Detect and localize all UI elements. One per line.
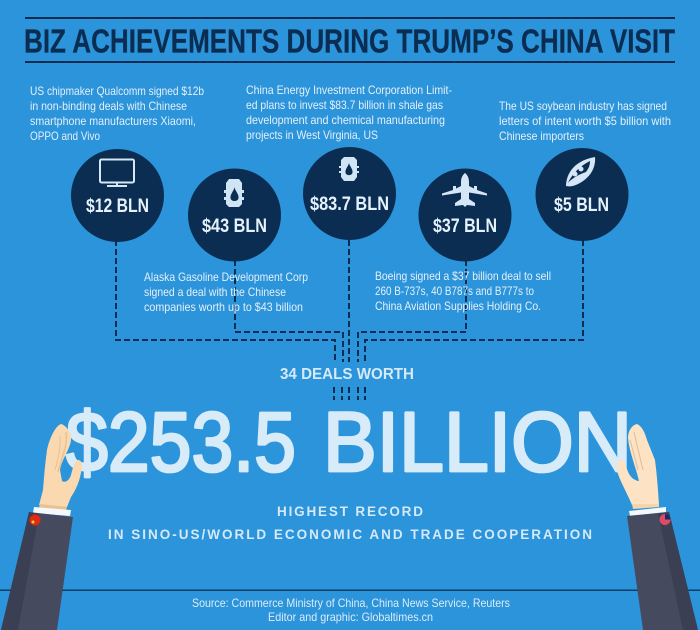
heading: 34 deals worth: 34 DEALS WORTH — [280, 366, 414, 383]
text block: Qualcomm: OPPO and Vivo — [30, 129, 100, 143]
text block: Boeing: Boeing signed a $37 billion deal to sell — [375, 269, 551, 283]
text block: China Energy — [246, 83, 452, 142]
circle: $43 BLN: $43 BLN — [202, 216, 267, 237]
source — [192, 596, 510, 624]
text block: soybean: The US soybean industry has signed — [499, 99, 667, 113]
text block: Boeing — [375, 269, 551, 313]
circle: $5 BLN — [536, 148, 628, 241]
text block: Qualcomm: US chipmaker Qualcomm signed $12b — [30, 84, 204, 98]
circle: $37 BLN: $37 BLN — [433, 216, 497, 237]
text block: Boeing: 260 B-737s, 40 B787s and B777s to — [375, 284, 534, 298]
icon: monitor — [100, 160, 134, 186]
text block: soybean — [499, 99, 671, 143]
circle: $12 BLN: $12 BLN — [86, 196, 149, 217]
source: Editor and graphic: Globaltimes.cn — [268, 610, 433, 624]
icon: airplane — [442, 173, 487, 207]
footer rule — [0, 590, 700, 591]
text block: China Energy: ed plans to invest $83.7 billion in shale gas — [246, 98, 443, 112]
right hand and sleeve — [617, 424, 698, 630]
big number — [66, 395, 632, 489]
circle: $37 BLN — [418, 168, 512, 262]
icon: gas canister — [224, 179, 244, 207]
text block: soybean: Chinese importers — [499, 129, 584, 143]
circle: $12 BLN — [71, 149, 164, 242]
icon: gas canister — [339, 157, 359, 181]
big number: $253.5 — [66, 395, 296, 489]
text block: soybean: letters of intent worth $5 billion with — [499, 114, 671, 128]
text block: Qualcomm: in non-binding deals with Chinese — [30, 99, 187, 113]
text block: China Energy: projects in West Virginia, US — [246, 128, 378, 142]
text block: Alaska Gasoline — [144, 270, 308, 314]
icon: soybean pod — [566, 157, 595, 186]
text block: Boeing: China Aviation Supplies Holding Co. — [375, 299, 541, 313]
subheading — [108, 504, 592, 542]
text block: Alaska Gasoline: companies worth up to $43 billion — [144, 300, 303, 314]
text block: Alaska Gasoline: signed a deal with the Chinese — [144, 285, 286, 299]
big number: BILLION — [323, 395, 632, 489]
left hand and sleeve — [1, 424, 82, 630]
text block: China Energy: development and chemical manufacturing — [246, 113, 445, 127]
subheading: HIGHEST RECORD — [277, 504, 423, 519]
subheading: IN SINO-US/WORLD ECONOMIC AND TRADE COOPERATION — [108, 527, 592, 542]
text block: Alaska Gasoline: Alaska Gasoline Development Corp — [144, 270, 308, 284]
circle: $83.7 BLN: $83.7 BLN — [310, 194, 389, 215]
dashed connector lines — [116, 240, 583, 400]
circle: $5 BLN: $5 BLN — [554, 195, 609, 216]
circle: $43 BLN — [188, 168, 281, 262]
source: Source: Commerce Ministry of China, China News Service, Reuters — [192, 596, 510, 610]
text block: China Energy: China Energy Investment Corporation Limit- — [246, 83, 452, 97]
text block: Qualcomm — [30, 84, 204, 143]
text block: Qualcomm: smartphone manufacturers Xiaomi, — [30, 114, 196, 128]
circle: $83.7 BLN — [303, 147, 396, 240]
